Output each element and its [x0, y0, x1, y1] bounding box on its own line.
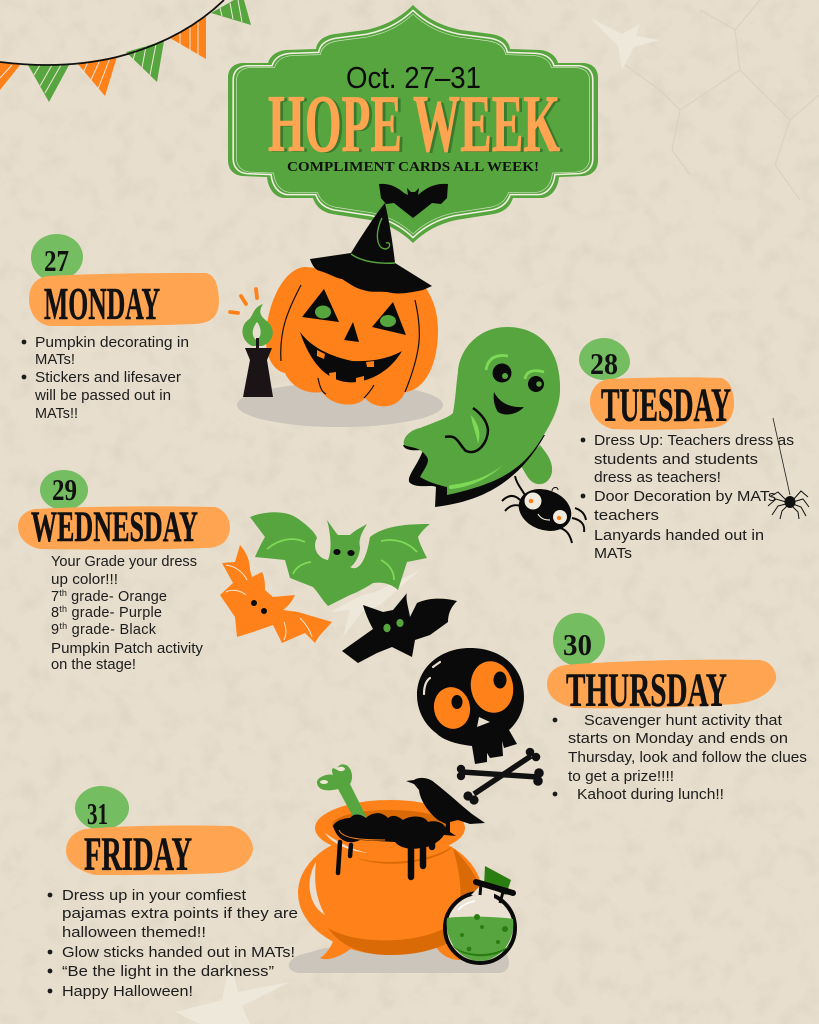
icon: candle	[230, 289, 273, 397]
bullet list: Scavenger hunt activity that	[584, 713, 782, 729]
flag green 3	[211, 0, 251, 25]
bullet list: Dress Up: Teachers dress as	[594, 433, 794, 449]
text block: grade- Purple	[67, 605, 162, 621]
heading pill	[547, 660, 776, 708]
flame	[242, 304, 273, 346]
icon: hanging spider	[768, 418, 809, 519]
pumpkin shadow	[237, 383, 443, 427]
bullet list: Pumpkin decorating in	[35, 335, 189, 351]
bullet list: to get a prize!!!!	[568, 769, 674, 785]
panel: Monday	[22, 234, 219, 422]
bullet list: dress as teachers!	[594, 470, 721, 486]
wing highlights	[267, 539, 417, 580]
text block: on the stage!	[51, 657, 136, 673]
flask glass	[480, 884, 500, 903]
ghost body	[404, 327, 560, 495]
bullet list: halloween themed!!	[62, 925, 206, 941]
icon: green bat	[250, 512, 430, 606]
text block: th	[59, 588, 67, 598]
panel: Wednesday	[18, 470, 230, 673]
panel: Tuesday	[579, 338, 794, 562]
bullet list	[553, 713, 807, 803]
decorative star behind bats	[330, 570, 420, 637]
icon: orange bat	[220, 545, 332, 643]
date: Oct. 27–31	[346, 60, 481, 95]
cauldron highlight	[310, 862, 325, 915]
text block: grade- Orange	[67, 589, 167, 605]
heading pill	[590, 377, 734, 430]
flask cork	[484, 866, 511, 895]
icon: ghost	[403, 327, 560, 507]
text block: 9	[51, 622, 59, 638]
bullet list: Glow sticks handed out in MATs!	[62, 945, 295, 961]
panel: Thursday	[547, 613, 807, 803]
ghost smile	[494, 392, 524, 414]
icon: potion flask	[445, 866, 515, 963]
heading pill	[18, 506, 230, 550]
title plaque	[228, 5, 598, 243]
day number: 30	[563, 627, 592, 662]
text block: Pumpkin Patch activity	[51, 641, 204, 657]
spider eyes	[524, 492, 542, 510]
subtitle: COMPLIMENT CARDS ALL WEEK!	[287, 160, 539, 175]
spider body	[513, 482, 577, 538]
heading: FRIDAY	[84, 828, 192, 881]
plaque shape	[228, 5, 598, 243]
ghost brows	[486, 356, 544, 379]
text block: grade- Black	[67, 622, 157, 638]
black bat eyes	[383, 624, 391, 632]
bullet list	[22, 335, 189, 422]
day number blob 31	[75, 786, 129, 830]
crossbones	[457, 748, 544, 805]
nose	[344, 322, 359, 342]
day number blob 30	[553, 613, 605, 666]
day number: 27	[44, 243, 69, 278]
bullet list: MATs!!	[35, 406, 78, 422]
day number blob 29	[40, 470, 88, 510]
text block: 7	[51, 589, 59, 605]
title: HOPE WEEK	[268, 78, 560, 169]
panel: Friday	[48, 786, 298, 1000]
bullet list: will be passed out in	[34, 388, 171, 404]
black goo	[333, 813, 446, 849]
decorative star bottom	[175, 960, 290, 1024]
bullet list: pajamas extra points if they are	[62, 906, 298, 922]
skull head	[417, 648, 524, 764]
icon: pumpkin with witch hat	[237, 203, 443, 427]
bullet list: Thursday, look and follow the clues	[568, 750, 807, 766]
ghost shadow	[403, 435, 545, 507]
day number blob 27	[31, 234, 83, 281]
title shadow: HOPE WEEK	[271, 79, 563, 170]
flag orange 2	[77, 57, 117, 96]
bunting string	[0, 0, 224, 65]
bullet list: MATs!	[35, 352, 75, 368]
heading pill	[29, 273, 219, 326]
icon: small spider	[502, 476, 586, 543]
ghost eyes	[492, 364, 512, 382]
text block	[51, 554, 204, 673]
cauldron feet	[320, 930, 470, 960]
ghost arm	[445, 408, 488, 452]
icon: skull with crossbones	[417, 648, 544, 805]
bullet list: Dress up in your comfiest	[62, 888, 246, 904]
ghost tail	[520, 445, 552, 484]
decorative star top right	[590, 18, 660, 70]
bullet list: Stickers and lifesaver	[35, 370, 181, 386]
bullet list: students and students	[594, 452, 758, 468]
bullet list: “Be the light in the darkness”	[62, 964, 274, 980]
day number: 28	[590, 346, 618, 381]
bullet list: MATs	[594, 546, 632, 562]
text block: up color!!!	[51, 572, 118, 588]
right eye	[372, 302, 406, 335]
flag orange 1	[0, 62, 20, 90]
cauldron rim	[315, 800, 465, 856]
heading: WEDNESDAY	[31, 504, 198, 551]
heading pill	[66, 825, 253, 875]
day number blob 28	[579, 338, 630, 380]
flag green 2	[126, 41, 164, 82]
potion liquid	[447, 917, 513, 961]
bullet list	[48, 888, 298, 1000]
cauldron shadow	[289, 948, 509, 973]
flag orange 3	[170, 17, 206, 59]
left eye	[302, 289, 339, 322]
bullet list: Happy Halloween!	[62, 984, 193, 1000]
day number: 29	[52, 472, 77, 507]
bullet list: Door Decoration by MATs	[594, 489, 776, 505]
bullet list: Lanyards handed out in	[594, 528, 764, 544]
pumpkin body	[266, 267, 438, 406]
bullet list: Kahoot during lunch!!	[577, 787, 724, 803]
bullet list: teachers	[594, 508, 659, 524]
icon: black bat	[342, 593, 457, 663]
text block: th	[59, 604, 67, 614]
text block: th	[59, 621, 67, 631]
cauldron body	[298, 831, 482, 955]
bullet list: starts on Monday and ends on	[568, 731, 788, 747]
bullet list	[581, 433, 794, 562]
witch hat	[310, 203, 432, 293]
raven	[406, 778, 485, 836]
icon: plaque bat	[379, 184, 448, 218]
day number: 31	[87, 796, 108, 831]
bunting banner	[0, 0, 251, 102]
candle body	[243, 338, 273, 397]
icon: cauldron	[298, 764, 485, 960]
skull eyes	[466, 657, 518, 717]
orange bat eyes	[251, 600, 257, 606]
flag green 1	[28, 65, 69, 102]
sparks	[230, 289, 257, 313]
text block: Your Grade your dress	[51, 554, 197, 570]
bone spoon	[317, 764, 376, 837]
bat eyes	[333, 549, 341, 555]
mouth	[300, 332, 402, 382]
text block: 8	[51, 605, 59, 621]
heading: MONDAY	[44, 278, 160, 329]
